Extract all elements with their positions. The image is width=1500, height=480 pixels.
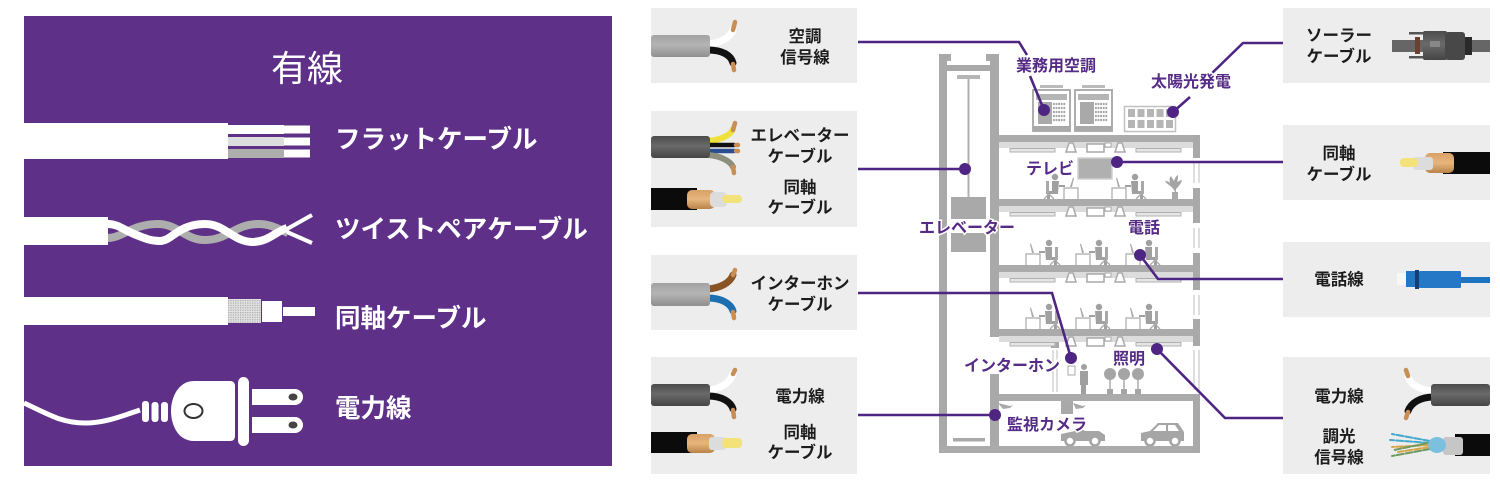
label: 空調	[788, 27, 822, 46]
label: ケーブル	[767, 146, 833, 166]
label: lighting: 照明	[1113, 351, 1145, 368]
label: intercom: インターホン	[964, 357, 1060, 375]
panel: elevator and coaxial cable	[651, 111, 857, 227]
label: ケーブル	[767, 294, 833, 314]
panel: telephone line	[1283, 242, 1490, 317]
label: 同軸	[1322, 144, 1356, 163]
label: solar power: 太陽光発電	[1151, 73, 1231, 91]
heading: wired: 有線	[271, 48, 343, 89]
label: ケーブル	[1306, 46, 1372, 66]
connector: solar	[1167, 43, 1283, 118]
icon: blue connector	[1397, 270, 1490, 289]
label: 信号線	[1314, 448, 1364, 467]
label: 同軸	[784, 178, 816, 197]
panel: power line and coaxial cable	[651, 357, 857, 474]
label: power line: 電力線	[335, 395, 412, 423]
parking with cars and cameras	[998, 403, 1184, 446]
icon: power cable	[651, 370, 735, 417]
lobby with person and trees	[1068, 364, 1144, 394]
label: twisted pair cable: ツイストペアケーブル	[335, 215, 588, 244]
icon: twisted pair cable	[24, 215, 312, 245]
label	[780, 27, 830, 67]
label: ケーブル	[767, 197, 833, 217]
label: flat cable: フラットケーブル	[335, 125, 537, 154]
label: coaxial cable: 同軸ケーブル	[335, 304, 486, 333]
label: television: テレビ	[1026, 159, 1074, 178]
panel: wired cable types	[24, 16, 612, 466]
icon: coaxial cable	[24, 297, 315, 325]
label	[750, 274, 850, 314]
floor slabs and outer walls	[939, 135, 1200, 453]
television	[1078, 158, 1112, 179]
label: 電力線	[775, 387, 825, 406]
connector: air conditioning	[858, 42, 1050, 116]
building cross-section	[939, 54, 1200, 453]
label: security camera: 監視カメラ	[1007, 416, 1087, 434]
panel: power line and dimming signal line	[1283, 357, 1490, 474]
rooftop solar panel	[1124, 106, 1176, 132]
icon: hatchback car	[1141, 423, 1184, 446]
panel: intercom cable	[651, 255, 857, 330]
office workers and plant	[1026, 174, 1182, 329]
label: インターホン	[750, 274, 850, 293]
label: 同軸	[784, 423, 816, 442]
panel: air conditioning signal line	[651, 8, 857, 83]
connector: lighting	[1151, 343, 1283, 418]
icon: dimming signal cable	[1390, 434, 1490, 456]
icon: convertible car	[1061, 428, 1105, 446]
label	[1314, 387, 1364, 467]
label	[767, 387, 833, 462]
label	[750, 126, 850, 217]
label: commercial air conditioning: 業務用空調	[1016, 56, 1096, 75]
icon: coaxial cable	[651, 188, 742, 210]
icon: elevator cable	[651, 123, 738, 173]
icon: grey two-core cable	[651, 22, 735, 70]
label: elevator: エレベーター	[919, 219, 1015, 237]
icon: power plug	[24, 377, 303, 446]
connector: television	[1111, 156, 1283, 168]
connector: telephone	[1134, 249, 1283, 279]
label: ケーブル	[767, 442, 833, 462]
label: 信号線	[780, 48, 830, 67]
connector: intercom	[858, 293, 1077, 364]
label	[1306, 144, 1372, 184]
label: 調光	[1322, 427, 1356, 446]
panel: solar cable	[1283, 8, 1490, 83]
label: エレベーター	[750, 126, 850, 145]
icon: solar connector	[1392, 31, 1490, 60]
icon: coaxial cable	[1400, 152, 1490, 174]
label: ケーブル	[1306, 164, 1372, 184]
label: telephone: 電話	[1128, 219, 1160, 237]
connector: elevator	[858, 163, 971, 175]
label	[1306, 27, 1372, 66]
rooftop air conditioning units	[1033, 85, 1112, 131]
panel: coaxial cable right	[1283, 125, 1490, 200]
label: 電力線	[1314, 387, 1364, 406]
icon: flat cable	[24, 123, 310, 159]
label: ソーラー	[1306, 27, 1372, 45]
connector: security camera	[858, 409, 1001, 421]
label: 電話線	[1314, 270, 1364, 289]
icon: coaxial cable	[651, 432, 742, 453]
ceiling fixtures	[999, 142, 1193, 346]
icon: power cable	[1406, 370, 1490, 418]
icon: intercom cable	[651, 270, 735, 318]
elevator shaft	[939, 54, 1000, 447]
